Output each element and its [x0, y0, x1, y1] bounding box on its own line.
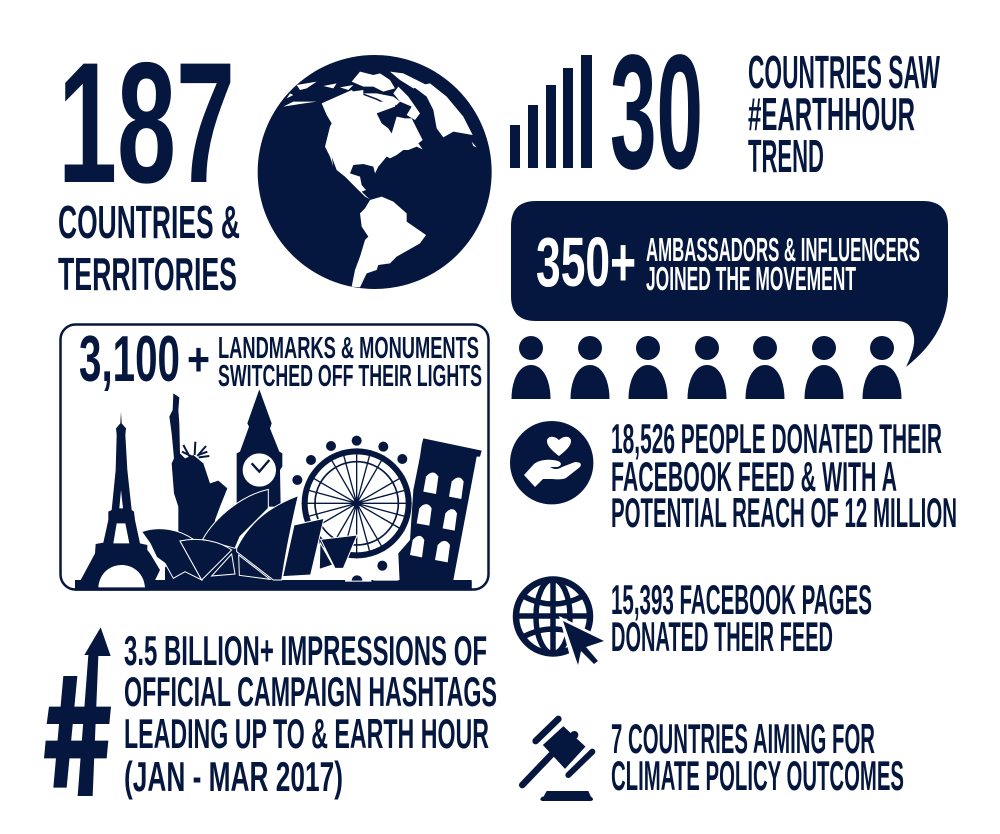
text: 7 countries climate policy: [611, 715, 904, 799]
caption: landmarks switched off: LANDMARKS & MONUMENTS: [218, 330, 479, 365]
icon: globe showing the Americas: [258, 55, 492, 289]
panel: landmarks and monuments: [60, 322, 488, 591]
stat: 3,100+: 3,100: [79, 322, 180, 395]
London Eye: [292, 436, 412, 582]
stat: 187 countries and territories: 187: [58, 27, 235, 219]
icon: globe with cursor: [516, 579, 610, 673]
text: 18,526 people donated: [611, 415, 957, 536]
icon: gavel: [522, 719, 593, 801]
Eiffel Tower: [75, 412, 160, 591]
stat: 30 countries saw #EarthHour trend: 30: [610, 20, 703, 203]
text: 3.5 billion impressions: LEADING UP TO & EARTH HOUR: [124, 710, 489, 757]
text: 15,393 Facebook pages: [611, 576, 872, 660]
text: 3.5 billion impressions: OFFICIAL CAMPAIGN HASHTAGS: [124, 668, 497, 715]
caption: landmarks switched off: SWITCHED OFF THEIR LIGHTS: [218, 358, 482, 393]
text: 3.5 billion impressions: 3.5 BILLION+ IMPRESSIONS OF: [124, 627, 487, 674]
Statue of Liberty: [169, 393, 227, 540]
speech bubble: 350+ ambassadors and influencers: 350+: [536, 223, 636, 301]
icon: hand holding heart: [510, 421, 593, 504]
icon: signal bars: [510, 55, 592, 168]
stat: 187 countries and territories: TERRITORIES: [58, 248, 237, 300]
plus sign: +: [187, 333, 210, 385]
text: 3.5 billion impressions: (JAN - MAR 2017): [124, 753, 343, 800]
stat: 30 countries saw #EarthHour trend: TREND: [748, 130, 824, 182]
stat: 30 countries saw #EarthHour trend: [610, 20, 940, 203]
stat: 187 countries and territories: [58, 27, 240, 300]
skyline illustration: [75, 389, 482, 591]
text: 3.5 billion impressions: [124, 627, 497, 800]
ground: [75, 580, 472, 591]
Sydney Opera House: [142, 489, 357, 580]
stat: 187 countries and territories: COUNTRIES &: [58, 196, 240, 248]
Big Ben: [237, 389, 282, 507]
icon: row of seven people: [512, 336, 902, 399]
Leaning Tower of Pisa: [398, 438, 482, 590]
icon: hashtag with upward arrow: [44, 627, 111, 796]
speech bubble: 350+ ambassadors and influencers: [511, 201, 948, 367]
caption: landmarks switched off: [218, 330, 482, 393]
